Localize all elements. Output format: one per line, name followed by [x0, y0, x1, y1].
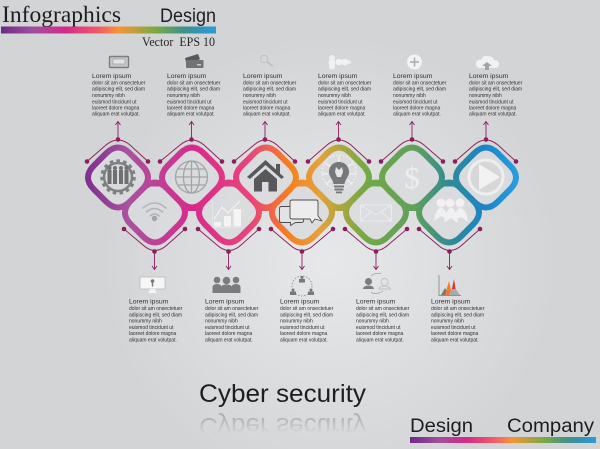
text block: aliquam erat volutpat.: [243, 112, 291, 118]
text block: laoreet dolore magna: [167, 106, 214, 112]
text block: dolor sit am onsectetuer: [205, 306, 259, 312]
text block: aliquam erat volutpat.: [393, 112, 441, 118]
text block: euismod tincidunt ut: [92, 99, 137, 105]
icon: people exchange: [363, 273, 390, 293]
text block: nonummy nibh: [318, 93, 351, 99]
text block: aliquam erat volutpat.: [129, 337, 177, 343]
text block: Lorem ipsum: [280, 298, 320, 306]
text block: nonummy nibh: [205, 318, 238, 324]
heading reflection: Cyber security: [199, 412, 367, 440]
text block: adipiscing elit, sed diam: [469, 87, 522, 93]
text block: adipiscing elit, sed diam: [431, 312, 484, 318]
text block: laoreet dolore magna: [243, 106, 290, 112]
text block: dolor sit am onsectetuer: [318, 80, 372, 86]
text block: laoreet dolore magna: [92, 106, 139, 112]
icon: light bulb: [322, 155, 356, 193]
text block: dolor sit am onsectetuer: [92, 80, 146, 86]
text block: laoreet dolore magna: [431, 331, 478, 337]
subtitle: Vector EPS 10: Vector EPS 10: [142, 34, 215, 49]
icon: group of people: [212, 277, 240, 293]
text block: nonummy nibh: [167, 93, 200, 99]
text block: euismod tincidunt ut: [318, 99, 363, 105]
text block: nonummy nibh: [129, 318, 162, 324]
text block: dolor sit am onsectetuer: [167, 80, 221, 86]
icon: gear with people: [102, 161, 134, 193]
icon: envelope: [360, 205, 392, 221]
icon: wifi: [143, 203, 166, 221]
text block: Lorem ipsum: [243, 73, 283, 80]
text block: euismod tincidunt ut: [167, 99, 212, 105]
text block: adipiscing elit, sed diam: [393, 87, 446, 93]
text block: adipiscing elit, sed diam: [280, 312, 333, 318]
icon: cloud upload: [476, 56, 499, 70]
panel: bottom item 5: [431, 275, 485, 343]
text block: aliquam erat volutpat.: [469, 112, 517, 118]
chain of rounded diamonds: [88, 148, 516, 242]
wire nodes: bottom row: [122, 227, 482, 254]
text block: nonummy nibh: [243, 93, 276, 99]
icon: card keypad: [110, 56, 128, 68]
text block: adipiscing elit, sed diam: [129, 312, 182, 318]
text block: adipiscing elit, sed diam: [243, 87, 296, 93]
text block: laoreet dolore magna: [205, 331, 252, 337]
icon: magnifier: [260, 55, 273, 66]
text block: Lorem ipsum: [129, 298, 169, 306]
icon: globe: [176, 161, 208, 193]
panel: top item 4: [318, 55, 372, 118]
text block: nonummy nibh: [431, 318, 464, 324]
text block: Lorem ipsum: [393, 73, 433, 80]
footer label: Design Company: Company: [507, 416, 595, 437]
text block: aliquam erat volutpat.: [205, 337, 253, 343]
panel: top item 5: [393, 54, 447, 118]
text block: laoreet dolore magna: [469, 106, 516, 112]
icon: puzzle cluster: [328, 55, 351, 70]
text block: laoreet dolore magna: [356, 331, 403, 337]
title: Infographics Design: Infographics: [2, 2, 121, 27]
text block: adipiscing elit, sed diam: [167, 87, 220, 93]
text block: euismod tincidunt ut: [129, 325, 174, 331]
text block: laoreet dolore magna: [280, 331, 327, 337]
text block: Lorem ipsum: [205, 298, 245, 306]
text block: adipiscing elit, sed diam: [92, 87, 145, 93]
text block: dolor sit am onsectetuer: [393, 80, 447, 86]
wire nodes: top row: [85, 137, 518, 164]
icon: monitor with keyhole: [140, 277, 165, 293]
icon: plus circle: [407, 54, 422, 70]
icon: dollar: $: [404, 160, 420, 195]
icon: credit cards: [185, 54, 204, 68]
text block: laoreet dolore magna: [393, 106, 440, 112]
text block: laoreet dolore magna: [318, 106, 365, 112]
text block: Lorem ipsum: [318, 73, 358, 80]
text block: nonummy nibh: [356, 318, 389, 324]
connector stubs: [146, 180, 458, 211]
text block: Lorem ipsum: [469, 73, 509, 80]
icon: house: [247, 160, 284, 192]
text block: aliquam erat volutpat.: [356, 337, 404, 343]
text block: aliquam erat volutpat.: [280, 337, 328, 343]
text block: nonummy nibh: [393, 93, 426, 99]
text block: dolor sit am onsectetuer: [431, 306, 485, 312]
text block: dolor sit am onsectetuer: [356, 306, 410, 312]
text block: euismod tincidunt ut: [469, 99, 514, 105]
text block: Lorem ipsum: [167, 73, 207, 80]
text block: nonummy nibh: [469, 93, 502, 99]
text block: euismod tincidunt ut: [205, 325, 250, 331]
title: Infographics Design: [2, 2, 216, 27]
text block: Lorem ipsum: [92, 73, 132, 80]
text block: nonummy nibh: [92, 93, 125, 99]
text block: adipiscing elit, sed diam: [356, 312, 409, 318]
text block: dolor sit am onsectetuer: [280, 306, 334, 312]
panel: top item 2: [167, 54, 221, 118]
text block: dolor sit am onsectetuer: [243, 80, 297, 86]
panel: bottom item 4: [356, 273, 410, 343]
panel: top item 3: [243, 55, 297, 118]
icon: area chart: [439, 275, 461, 296]
heading: Cyber security: Cyber security: [199, 380, 367, 408]
icon: speech bubbles: [280, 200, 322, 226]
title: Infographics Design: Design: [160, 6, 216, 27]
text block: adipiscing elit, sed diam: [205, 312, 258, 318]
footer label: Design Company: [410, 416, 595, 437]
text block: euismod tincidunt ut: [280, 325, 325, 331]
icon: play button: [469, 160, 503, 194]
footer label: Design Company: Design: [410, 416, 473, 437]
text block: dolor sit am onsectetuer: [129, 306, 183, 312]
text block: Lorem ipsum: [356, 298, 396, 306]
text block: laoreet dolore magna: [129, 331, 176, 337]
wires and arrows: bottom row: [124, 229, 480, 270]
text block: dolor sit am onsectetuer: [469, 80, 523, 86]
rainbow bar: top: [1, 26, 216, 34]
wires and arrows: top row: [87, 122, 516, 162]
text block: Lorem ipsum: [431, 298, 471, 306]
text block: nonummy nibh: [280, 318, 313, 324]
icon: rising bar chart: [212, 200, 241, 228]
rainbow bar: bottom: [410, 437, 596, 443]
text block: aliquam erat volutpat.: [167, 112, 215, 118]
text block: euismod tincidunt ut: [356, 325, 401, 331]
panel: bottom item 1: [129, 277, 183, 343]
text block: euismod tincidunt ut: [243, 99, 288, 105]
panel: bottom item 2: [205, 277, 259, 343]
panel: top item 1: [92, 56, 146, 118]
text block: adipiscing elit, sed diam: [318, 87, 371, 93]
panel: bottom item 3: [280, 276, 334, 343]
text block: aliquam erat volutpat.: [318, 112, 366, 118]
text block: aliquam erat volutpat.: [92, 112, 140, 118]
icon: three people white: [434, 198, 468, 223]
text block: euismod tincidunt ut: [431, 325, 476, 331]
icon: team circle: [290, 276, 314, 296]
text block: aliquam erat volutpat.: [431, 337, 479, 343]
panel: top item 6: [469, 56, 523, 118]
text block: euismod tincidunt ut: [393, 99, 438, 105]
